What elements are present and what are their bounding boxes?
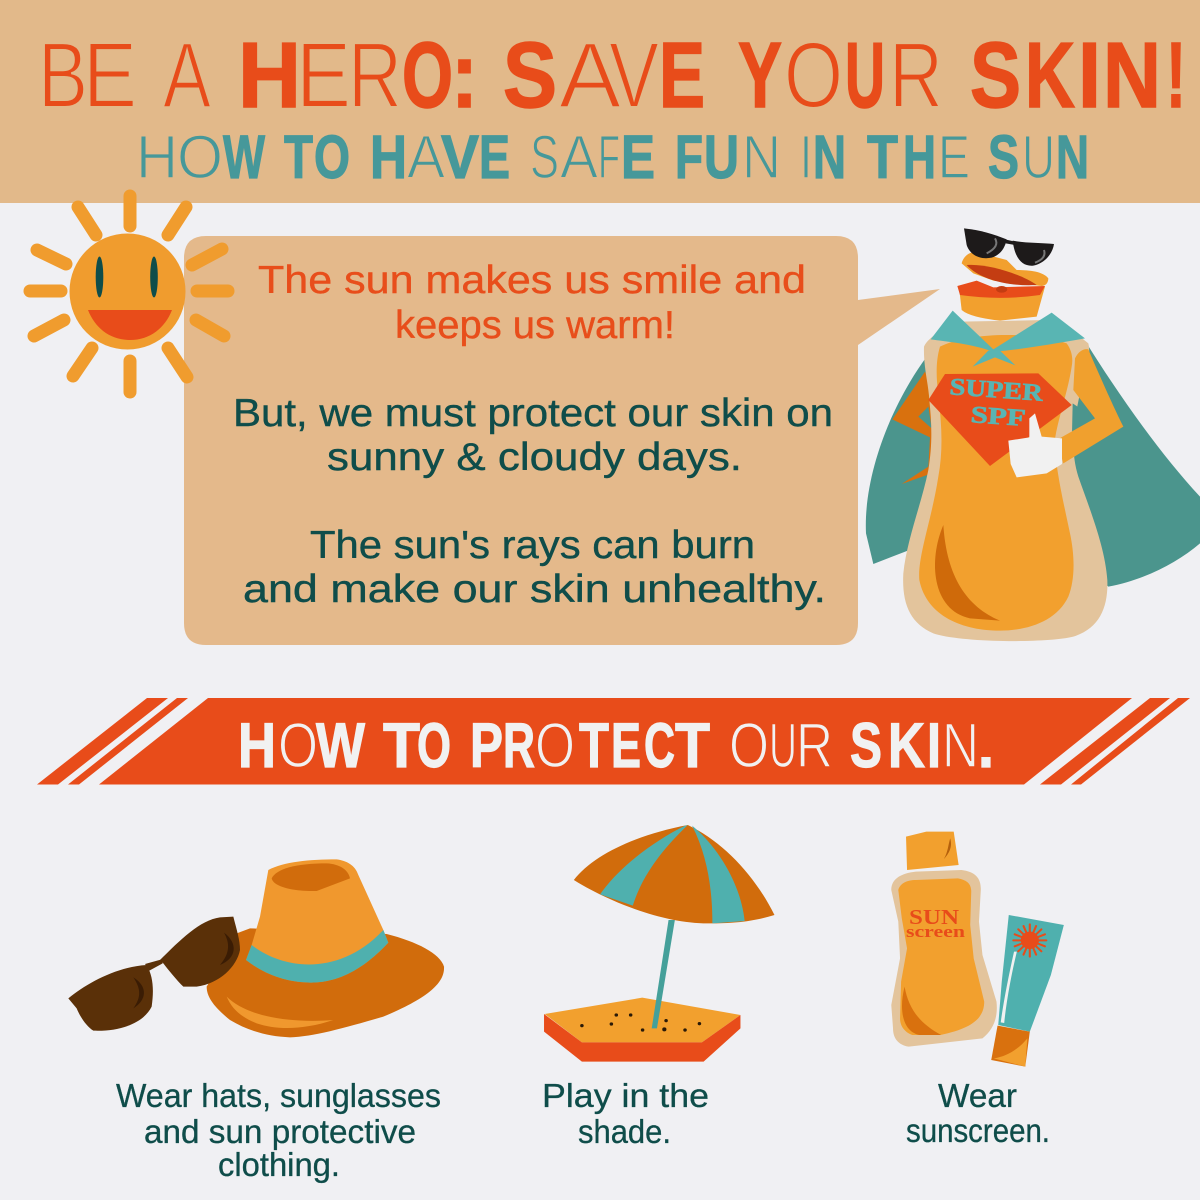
banner: how to protect our skin: K xyxy=(888,711,925,781)
banner: how to protect our skin: H xyxy=(238,711,276,781)
subtitle: N xyxy=(1056,123,1089,191)
banner: how to protect our skin: C xyxy=(644,711,675,781)
title: B xyxy=(38,23,88,127)
banner: how to protect our skin: R xyxy=(503,711,535,781)
protect message: sunny & cloudy days. xyxy=(327,436,742,479)
subtitle: W xyxy=(223,123,265,191)
banner: how to protect our skin xyxy=(37,698,1190,784)
subtitle: E xyxy=(479,123,510,191)
subtitle: H xyxy=(370,123,407,191)
title: E xyxy=(83,23,137,127)
superhero sunscreen bottle: SUPER xyxy=(949,374,1044,407)
burn warning message: and make our skin unhealthy. xyxy=(243,568,826,611)
banner: how to protect our skin: T xyxy=(579,711,609,781)
subtitle: H xyxy=(136,123,178,191)
subtitle: V xyxy=(441,123,479,191)
intro message: orange xyxy=(258,259,806,347)
subtitle: N xyxy=(813,123,846,191)
caption: hats and sunglasses: clothing. xyxy=(218,1146,340,1183)
intro message: orange: The sun makes us smile and xyxy=(258,259,806,302)
title: R xyxy=(889,23,943,127)
subtitle: U xyxy=(1022,123,1055,191)
burn warning message: The sun's rays can burn xyxy=(310,524,755,567)
title: U xyxy=(845,23,885,127)
title: V xyxy=(609,23,659,127)
title: K xyxy=(1025,23,1075,127)
banner: how to protect our skin: . xyxy=(978,711,994,781)
title: I xyxy=(1078,23,1101,127)
banner: how to protect our skin: R xyxy=(796,711,833,781)
banner: how to protect our skin: O xyxy=(729,711,769,781)
banner: how to protect our skin: I xyxy=(927,711,941,781)
title: O xyxy=(784,23,843,127)
subtitle: S xyxy=(988,123,1019,191)
subtitle: T xyxy=(284,123,313,191)
title: A xyxy=(559,23,621,127)
title: R xyxy=(348,23,402,127)
caption: shade xyxy=(542,1077,709,1150)
subtitle: A xyxy=(560,123,598,191)
intro message: orange: keeps us warm! xyxy=(395,304,675,347)
icon: sunscreen bottle and tube: SUN xyxy=(909,905,959,929)
subtitle: F xyxy=(675,123,703,191)
burn warning message xyxy=(243,524,826,611)
subtitle: E xyxy=(938,123,970,191)
banner: how to protect our skin: T xyxy=(383,711,420,781)
subtitle xyxy=(136,123,1089,191)
banner: how to protect our skin: U xyxy=(769,711,797,781)
title: S xyxy=(503,23,557,127)
superhero sunscreen bottle: SPF xyxy=(970,402,1026,432)
title: N xyxy=(1103,23,1161,127)
title: H xyxy=(238,23,301,127)
subtitle: U xyxy=(704,123,739,191)
subtitle: O xyxy=(314,123,350,191)
caption: sunscreen: sunscreen. xyxy=(906,1112,1050,1149)
banner: how to protect our skin: W xyxy=(316,711,365,781)
title: : xyxy=(451,23,478,127)
subtitle: T xyxy=(867,123,898,191)
icon: hat and sunglasses xyxy=(68,859,444,1037)
subtitle: S xyxy=(530,123,559,191)
caption: sunscreen: Wear xyxy=(938,1077,1017,1114)
icon: sunscreen bottle and tube xyxy=(891,832,1064,1067)
banner: how to protect our skin: P xyxy=(470,711,503,781)
title: O xyxy=(402,23,453,127)
caption: shade: Play in the xyxy=(542,1077,709,1114)
caption: shade: shade. xyxy=(578,1113,671,1150)
title: Y xyxy=(738,23,782,127)
title: A xyxy=(163,23,211,127)
superhero sunscreen bottle xyxy=(866,228,1200,641)
subtitle: A xyxy=(407,123,445,191)
banner: how to protect our skin: O xyxy=(278,711,318,781)
icon: beach umbrella xyxy=(544,825,774,1062)
banner: how to protect our skin: S xyxy=(850,711,882,781)
subtitle: E xyxy=(621,123,655,191)
subtitle: H xyxy=(903,123,936,191)
title: E xyxy=(659,23,705,127)
caption: sunscreen xyxy=(906,1077,1050,1149)
banner: how to protect our skin: E xyxy=(611,711,641,781)
caption: hats and sunglasses xyxy=(116,1077,441,1183)
title: ! xyxy=(1166,23,1186,127)
subtitle: O xyxy=(177,123,223,191)
banner: how to protect our skin: O xyxy=(535,711,575,781)
banner: how to protect our skin: T xyxy=(675,711,710,781)
title: E xyxy=(296,23,351,127)
icon: sunscreen bottle and tube: screen xyxy=(906,922,966,941)
header band xyxy=(0,0,1200,203)
caption: hats and sunglasses: Wear hats, sunglasses xyxy=(116,1077,441,1114)
protect message: But, we must protect our skin on xyxy=(233,392,833,435)
speech bubble xyxy=(184,236,940,645)
title: S xyxy=(970,23,1021,127)
icon: smiling sun xyxy=(30,196,228,392)
title xyxy=(38,23,1186,127)
banner: how to protect our skin: N xyxy=(942,711,979,781)
protect message xyxy=(233,392,833,479)
subtitle: F xyxy=(598,123,620,191)
banner: how to protect our skin: O xyxy=(417,711,451,781)
subtitle: N xyxy=(742,123,781,191)
subtitle: I xyxy=(800,123,812,191)
caption: hats and sunglasses: and sun protective xyxy=(144,1113,416,1150)
